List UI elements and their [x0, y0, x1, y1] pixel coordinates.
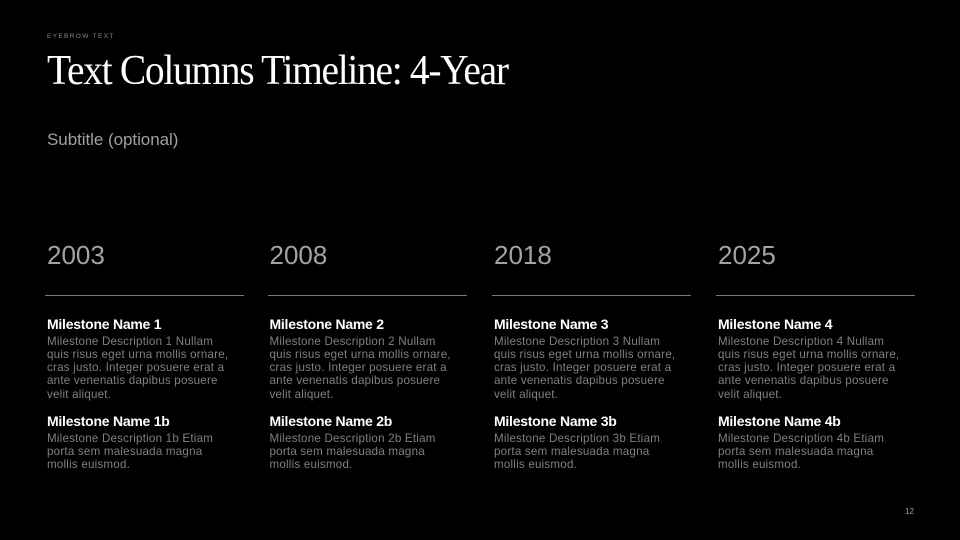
milestone description 3: velit aliquet. [494, 388, 558, 401]
milestone description 1: ante venenatis dapibus posuere [47, 374, 218, 387]
milestone description 4b: porta sem malesuada magna [718, 445, 873, 458]
milestone description 2: cras justo. Integer posuere erat a [270, 361, 447, 374]
rule [45, 294, 244, 296]
milestone name 4: Milestone Name 4 [718, 316, 832, 332]
milestone name 3: Milestone Name 3 [494, 316, 608, 332]
milestone description 3b: porta sem malesuada magna [494, 445, 649, 458]
column: 2025 [716, 240, 915, 471]
milestone description 2: Milestone Description 2 Nullam [270, 335, 436, 348]
milestone description 1b: mollis euismod. [47, 458, 130, 471]
milestone description 1b: porta sem malesuada magna [47, 445, 202, 458]
milestone description 1: cras justo. Integer posuere erat a [47, 361, 224, 374]
milestone description 4: Milestone Description 4 Nullam [718, 335, 884, 348]
milestone description 2b: mollis euismod. [270, 458, 353, 471]
milestone name 1b: Milestone Name 1b [47, 413, 170, 429]
milestone description 4b: Milestone Description 4b Etiam [718, 432, 884, 445]
milestone description 1b: Milestone Description 1b Etiam [47, 432, 213, 445]
column: 2008 [268, 240, 467, 471]
milestone name 2b: Milestone Name 2b [270, 413, 392, 429]
milestone description 4: ante venenatis dapibus posuere [718, 374, 889, 387]
milestone description 2 [270, 335, 451, 401]
milestone description 2b: porta sem malesuada magna [270, 445, 425, 458]
milestone description 1 [47, 335, 228, 401]
year: 2018 [494, 240, 552, 270]
milestone description 3: cras justo. Integer posuere erat a [494, 361, 671, 374]
milestone name 3b: Milestone Name 3b [494, 413, 617, 429]
milestone description 4: cras justo. Integer posuere erat a [718, 361, 895, 374]
milestone description 4 [718, 335, 899, 401]
year: 2025 [718, 240, 776, 270]
milestone description 3 [494, 335, 675, 401]
milestone description 3: ante venenatis dapibus posuere [494, 374, 665, 387]
milestone description 3: quis risus eget urna mollis ornare, [494, 348, 675, 361]
rule [268, 294, 466, 296]
subtitle: Subtitle (optional) [47, 130, 178, 149]
milestone name 1: Milestone Name 1 [47, 316, 161, 332]
eyebrow: EYEBROW TEXT [47, 33, 115, 40]
rule [716, 294, 915, 296]
milestone description 2: velit aliquet. [270, 388, 334, 401]
column: 2003 [45, 240, 244, 471]
milestone description 4b [718, 432, 884, 471]
milestone description 4b: mollis euismod. [718, 458, 801, 471]
page number: 12 [905, 507, 914, 516]
milestone name 4b: Milestone Name 4b [718, 413, 841, 429]
milestone description 3b: Milestone Description 3b Etiam [494, 432, 660, 445]
rule [492, 294, 691, 296]
year: 2003 [47, 240, 105, 270]
milestone description 2: ante venenatis dapibus posuere [270, 374, 440, 387]
milestone description 1: Milestone Description 1 Nullam [47, 335, 213, 348]
milestone description 2b [270, 432, 436, 471]
milestone description 2: quis risus eget urna mollis ornare, [270, 348, 451, 361]
milestone name 2: Milestone Name 2 [270, 316, 384, 332]
milestone description 4: quis risus eget urna mollis ornare, [718, 348, 899, 361]
year: 2008 [270, 240, 327, 270]
milestone description 2b: Milestone Description 2b Etiam [270, 432, 436, 445]
milestone description 1: velit aliquet. [47, 388, 111, 401]
column: 2018 [492, 240, 691, 471]
milestone description 3b [494, 432, 660, 471]
milestone description 1: quis risus eget urna mollis ornare, [47, 348, 228, 361]
milestone description 4: velit aliquet. [718, 388, 782, 401]
title: Text Columns Timeline: 4-Year [47, 48, 508, 94]
milestone description 3b: mollis euismod. [494, 458, 577, 471]
milestone description 1b [47, 432, 213, 471]
milestone description 3: Milestone Description 3 Nullam [494, 335, 660, 348]
